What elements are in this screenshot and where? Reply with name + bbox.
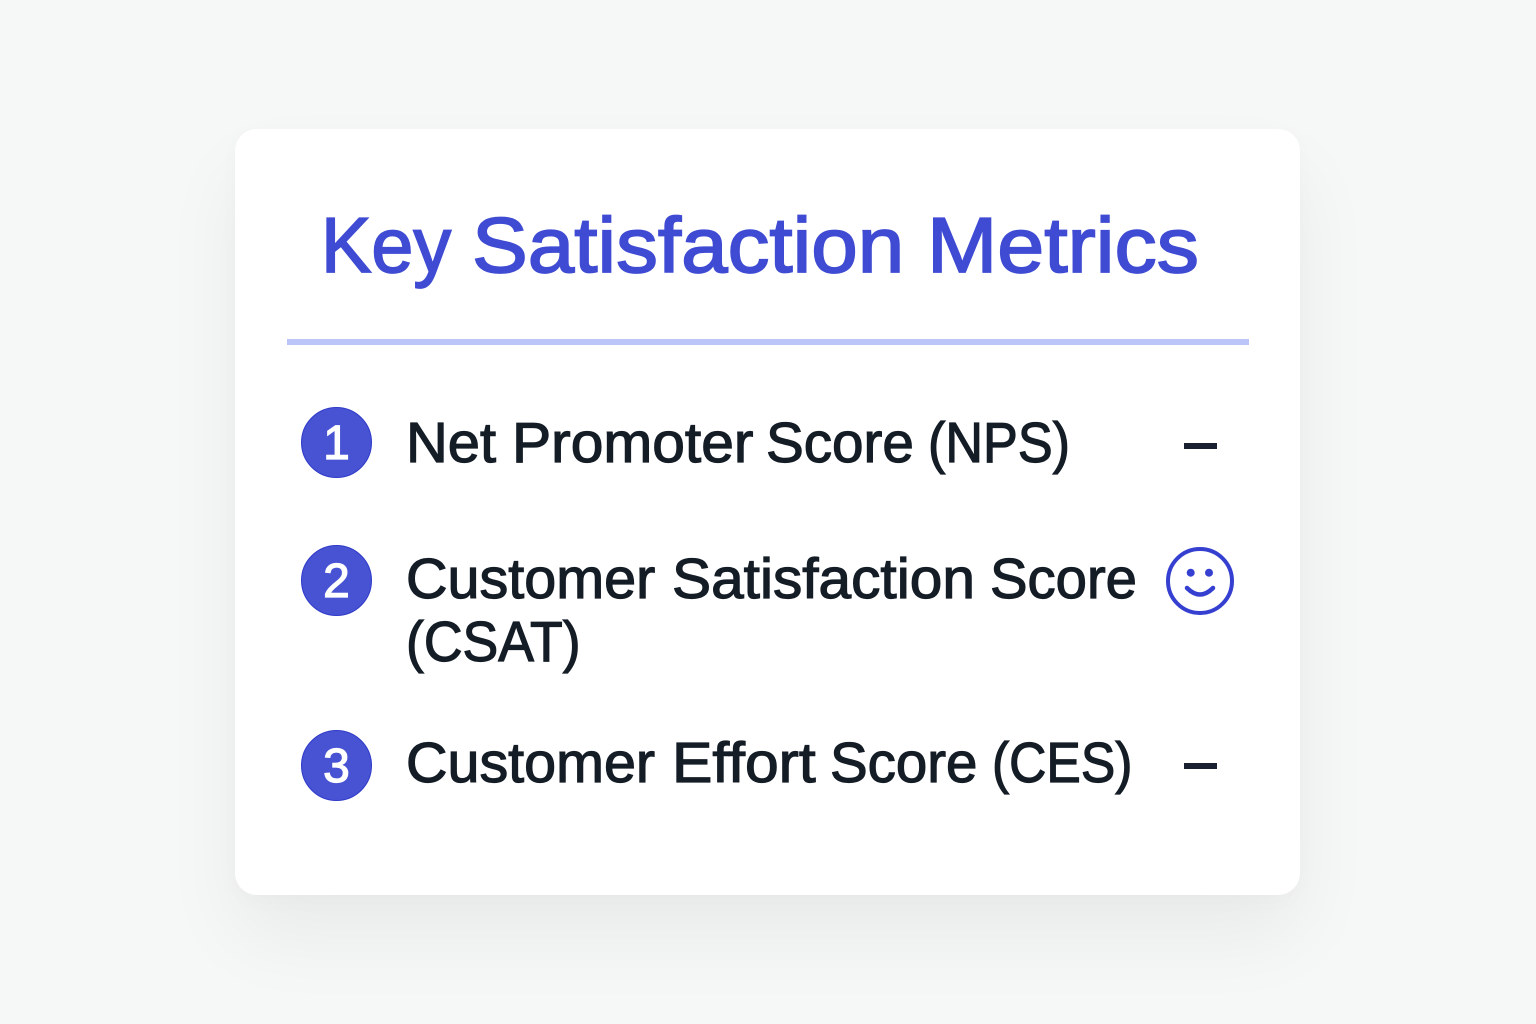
number badge 2: 2 [323,555,350,608]
title: Satisfaction [472,201,904,289]
metric label: NPS [406,410,1070,475]
icon: dash 1 [1184,443,1217,449]
metric label: NPS: Net [406,410,496,474]
icon: dash 2 [1184,762,1217,768]
metric label: CES: Customer [406,730,655,794]
metric label: NPS: Promoter [512,410,753,474]
metric label: CES [406,730,1132,795]
panel: metrics card [235,129,1300,895]
metric label: NPS: Score [766,410,914,474]
metric label: CSAT: Score [990,546,1137,610]
number badge 3 [301,730,372,801]
title: Metrics [927,201,1199,289]
metric label: CES: Score [830,730,977,794]
metric label: CSAT: (CSAT) [406,610,581,674]
number badge 1: 1 [323,417,350,470]
metric label: CSAT [406,546,1137,674]
icon: smiley [1166,547,1234,615]
metric label: CES: (CES) [992,730,1132,794]
metric label: NPS: (NPS) [928,410,1070,474]
metric label: CSAT: Satisfaction [672,546,975,610]
title: Key [321,201,451,289]
number badge 3: 3 [323,740,350,793]
metric label: CSAT: Customer [406,546,655,610]
title [321,201,1199,289]
number badge 2 [301,545,372,616]
number badge 1 [301,407,372,478]
metric label: CES: Effort [672,730,816,794]
title divider [287,339,1249,345]
